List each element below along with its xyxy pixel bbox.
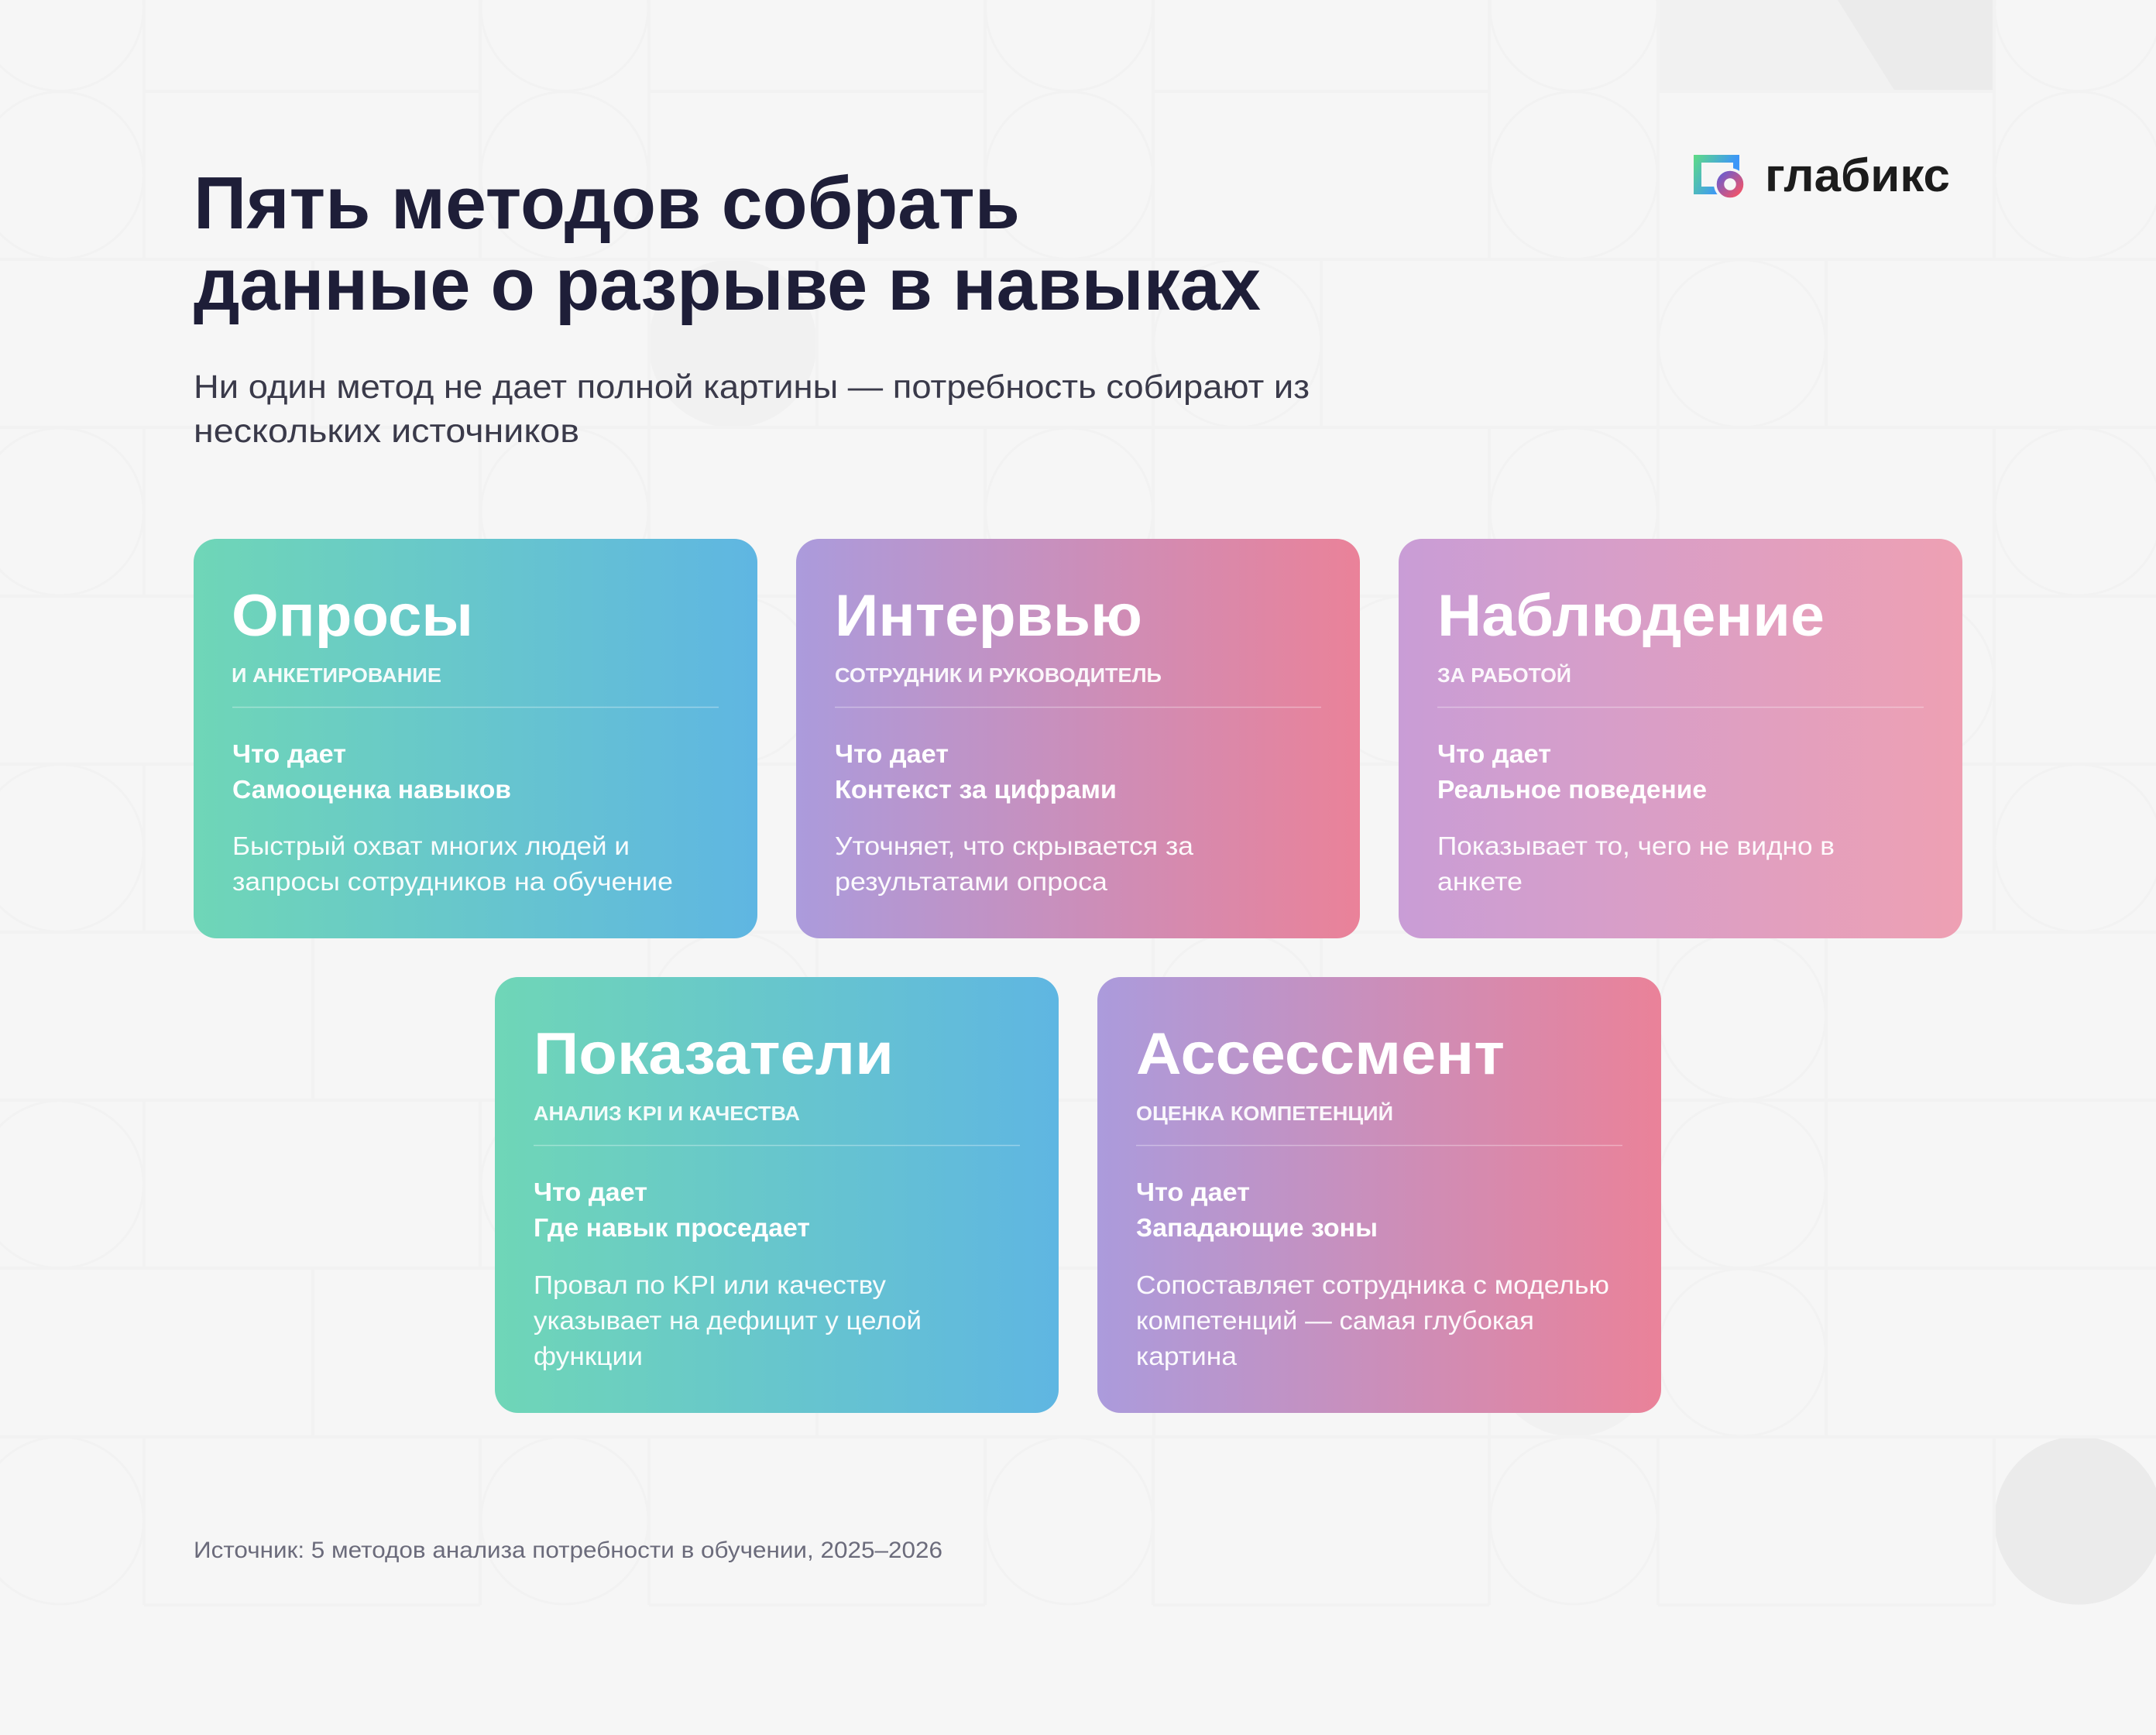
description [1136,1270,1609,1370]
logo wordmark: глабикс [1765,149,1950,201]
description: анкете [1437,867,1523,896]
what it gives: Что дает [534,1178,647,1206]
icon: logo mark [1694,155,1746,201]
what it gives [232,739,511,804]
title: Пять методов собрать [194,162,1020,245]
description: функции [534,1342,643,1370]
title: данные о разрыве в навыках [194,243,1261,326]
card subheading: АНАЛИЗ KPI И КАЧЕСТВА [534,1102,800,1125]
card subheading: И АНКЕТИРОВАНИЕ [232,663,441,687]
description: Уточняет, что скрывается за [835,831,1194,860]
card heading: Ассессмент: Ассессмент [1136,1021,1505,1087]
description [534,1270,922,1370]
card heading: Интервью: Интервью [835,583,1142,649]
source footnote: Источник: 5 методов анализа потребности в обучении, 2025–2026 [194,1538,942,1563]
description: Провал по KPI или качеству [534,1270,887,1299]
description: указывает на дефицит у целой [534,1306,922,1335]
subtitle: Ни один метод не дает полной картины — потребность собирают из [194,369,1310,406]
what it gives [1136,1178,1378,1242]
description [232,831,673,896]
panel: Интервью [796,539,1360,938]
card subheading: ОЦЕНКА КОМПЕТЕНЦИЙ [1136,1102,1393,1125]
description [835,831,1194,896]
subtitle: нескольких источников [194,413,579,450]
what it gives: Что дает [1437,739,1551,768]
subtitle [194,369,1310,450]
what it gives: Самооценка навыков [232,775,511,804]
panel: Показатели [495,977,1059,1413]
what it gives [835,739,1117,804]
what it gives: Западающие зоны [1136,1213,1378,1242]
card heading: Показатели: Показатели [534,1021,894,1087]
what it gives [1437,739,1707,804]
logo: глабикс [1694,149,1950,201]
description: Показывает то, чего не видно в [1437,831,1835,860]
what it gives [534,1178,810,1242]
description: Сопоставляет сотрудника с моделью [1136,1270,1609,1299]
panel: Ассессмент [1097,977,1661,1413]
description: запросы сотрудников на обучение [232,867,673,896]
description [1437,831,1835,896]
what it gives: Контекст за цифрами [835,775,1117,804]
panel: Наблюдение [1399,539,1962,938]
card heading: Опросы: Опросы [232,583,473,649]
description: картина [1136,1342,1238,1370]
what it gives: Что дает [1136,1178,1250,1206]
title [194,162,1261,326]
what it gives: Где навык проседает [534,1213,810,1242]
description: результатами опроса [835,867,1108,896]
card heading: Наблюдение: Наблюдение [1437,583,1825,649]
description: компетенций — самая глубокая [1136,1306,1534,1335]
panel: Опросы [194,539,757,938]
what it gives: Что дает [835,739,949,768]
card subheading: СОТРУДНИК И РУКОВОДИТЕЛЬ [835,663,1162,687]
what it gives: Что дает [232,739,346,768]
card subheading: ЗА РАБОТОЙ [1437,663,1571,687]
what it gives: Реальное поведение [1437,775,1707,804]
description: Быстрый охват многих людей и [232,831,630,860]
